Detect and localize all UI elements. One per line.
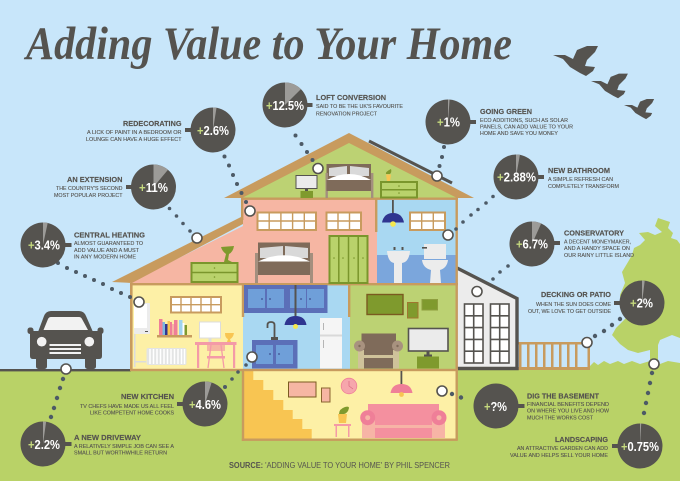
item: loft conversion: SAID TO BE THE UK'S FAVOURITE	[316, 104, 403, 110]
item: conservatory	[510, 221, 634, 266]
basement pictures	[288, 382, 330, 402]
item: redecorating: A LICK OF PAINT IN A BEDROOM OR	[87, 130, 182, 136]
basement sofa	[360, 404, 446, 438]
bathroom	[377, 199, 456, 284]
item: loft conversion	[262, 82, 403, 128]
attic bed	[326, 164, 373, 198]
connector markers	[61, 164, 659, 396]
item: dig the basement: DIG THE BASEMENT	[527, 392, 599, 400]
connector dots	[49, 134, 654, 419]
item: new bathroom	[494, 154, 619, 200]
item: dig the basement: ON WHERE YOU LIVE AND HOW	[527, 408, 609, 414]
car	[28, 311, 104, 369]
item: going green: GOING GREEN	[480, 107, 532, 116]
item: dig the basement	[474, 384, 609, 428]
item: new kitchen: LIKE COMPETENT HOME COOKS	[90, 410, 174, 416]
item: new kitchen: NEW KITCHEN	[121, 392, 174, 401]
item: decking or patio: +2%	[630, 296, 653, 310]
fridge	[320, 318, 342, 368]
living room pictures	[367, 294, 438, 318]
item: redecorating	[86, 108, 236, 152]
attic drawers	[381, 169, 417, 198]
left room	[132, 285, 243, 369]
sink cabinet	[252, 322, 298, 368]
basement	[243, 371, 457, 439]
item: conservatory: OUR RAINY LITTLE ISLAND	[564, 253, 634, 259]
attic	[224, 133, 474, 198]
item: new kitchen: +4.6%	[189, 397, 221, 412]
item: redecorating: REDECORATING	[123, 119, 182, 128]
item: loft conversion: +12.5%	[266, 98, 304, 113]
item: decking or patio: DECKING OR PATIO	[541, 290, 611, 299]
house	[112, 133, 474, 441]
radiator	[146, 348, 186, 365]
bathroom lamp	[382, 200, 404, 227]
pink room drawers and lamp	[192, 246, 238, 282]
attic monitor	[296, 176, 317, 198]
item: dig the basement: +?%	[484, 399, 507, 414]
item: a new driveway: A NEW DRIVEWAY	[74, 433, 141, 442]
item: going green: HOME AND SAVE YOU MONEY	[480, 131, 558, 137]
ground	[0, 370, 680, 481]
item: an extension: AN EXTENSION	[67, 175, 122, 184]
item: landscaping: LANDSCAPING	[555, 435, 608, 444]
item: dig the basement: FINANCIAL BENEFITS DEPEND	[527, 402, 609, 408]
item: going green	[426, 100, 573, 144]
television	[408, 328, 448, 368]
wardrobe	[330, 236, 368, 283]
item: redecorating: LOUNGE CAN HAVE A HUGE EFFECT	[86, 137, 182, 143]
item: a new driveway	[20, 421, 174, 466]
item: going green: +1%	[437, 114, 460, 130]
lean-to roof	[112, 216, 243, 283]
solar panel	[369, 141, 452, 183]
item: going green: PANELS, CAN ADD VALUE TO YOUR	[480, 124, 573, 130]
armchair	[354, 334, 403, 368]
fence	[518, 342, 590, 370]
birds	[553, 46, 654, 119]
books	[157, 319, 192, 338]
side extension	[457, 268, 517, 368]
item: decking or patio	[528, 280, 664, 326]
window left	[464, 304, 509, 363]
item: central heating: CENTRAL HEATING	[74, 230, 145, 240]
road line	[0, 369, 131, 371]
item: landscaping: VALUE AND HELPS SELL YOUR HOME	[510, 453, 608, 459]
item: central heating: IN ANY MODERN HOME	[74, 254, 136, 260]
left room window	[171, 297, 221, 312]
upper floor pink	[131, 198, 377, 284]
item: new bathroom: +2.88%	[497, 170, 536, 184]
item: new bathroom: COMPLETELY TRANSFORM	[548, 184, 619, 190]
item: central heating	[20, 222, 145, 268]
item: landscaping: +0.75%	[621, 439, 659, 454]
item: an extension: +11%	[139, 180, 168, 195]
item: new bathroom: A SIMPLE REFRESH CAN	[548, 177, 613, 183]
item: conservatory: CONSERVATORY	[564, 228, 624, 238]
item: an extension: THE COUNTRY'S SECOND	[56, 186, 122, 192]
sink	[387, 247, 410, 283]
kitchen	[243, 285, 350, 369]
item: decking or patio: OUT, WE LOVE TO GET OUTSIDE	[528, 309, 611, 315]
item: landscaping: AN ATTRACTIVE GARDEN CAN ADD	[517, 446, 608, 452]
kitchen upper cabinets	[244, 285, 328, 313]
item: decking or patio: WHEN THE SUN DOES COME	[536, 302, 611, 308]
item: a new driveway: +2.2%	[28, 437, 60, 452]
item: a new driveway: A RELATIVELY SIMPLE JOB CAN SEE A	[74, 444, 174, 450]
item: central heating: +3.4%	[28, 238, 60, 252]
item: dig the basement: MUCH THE WORKS COST	[527, 416, 593, 422]
item: loft conversion: RENOVATION PROJECT	[316, 112, 377, 118]
tree	[590, 218, 680, 372]
basement lamp	[390, 371, 412, 397]
bedroom bed	[255, 242, 313, 283]
toilet	[422, 244, 448, 283]
item: loft conversion: LOFT CONVERSION	[316, 93, 386, 102]
item: redecorating: +2.6%	[197, 123, 229, 138]
item: an extension: MOST POPULAR PROJECT	[54, 193, 123, 199]
item: conservatory: A DECENT MONEYMAKER,	[564, 240, 631, 246]
item: an extension	[54, 164, 176, 210]
clock	[341, 378, 357, 394]
item: new kitchen: TV CHEFS HAVE MADE US ALL FEEL	[80, 404, 175, 410]
desk with computer	[195, 322, 236, 368]
item: central heating: ADD VALUE AND A MUST	[74, 248, 139, 254]
bathroom window	[410, 212, 445, 230]
kitchen lamp	[284, 285, 306, 329]
bedroom windows	[258, 212, 361, 230]
item: conservatory: +6.7%	[516, 236, 548, 252]
item: new kitchen	[80, 382, 228, 426]
title: Adding Value to Your Home	[23, 18, 512, 70]
source line: SOURCE: 'ADDING VALUE TO YOUR HOME' BY PHIL SPENCER	[229, 461, 450, 470]
walls	[130, 198, 458, 441]
living room	[350, 285, 456, 369]
item: central heating: ALMOST GUARANTEED TO	[74, 241, 143, 247]
basement plant table	[334, 407, 351, 437]
item: conservatory: AND A HANDY SPACE ON	[564, 246, 630, 252]
item: going green: ECO ADDITIONS, SUCH AS SOLAR	[480, 118, 568, 124]
item: landscaping	[510, 423, 662, 468]
boiler	[134, 303, 150, 367]
item: new bathroom: NEW BATHROOM	[548, 166, 610, 175]
item: a new driveway: SMALL BUT WORTHWHILE RETURN	[74, 450, 167, 456]
